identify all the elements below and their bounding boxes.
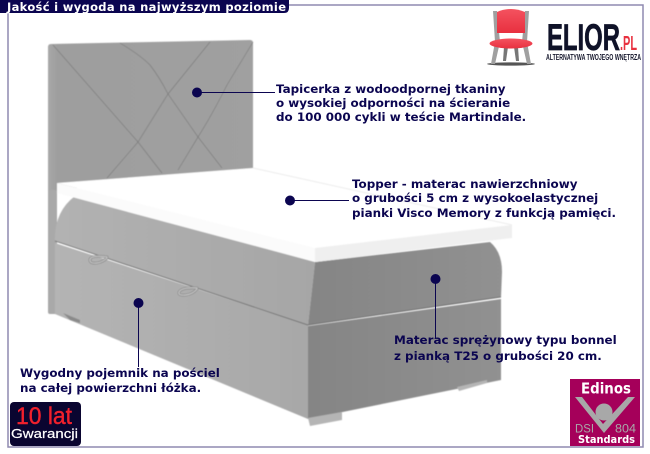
badge: Edinos standards: Edinos <box>581 380 631 398</box>
icon: V and circle <box>575 397 635 433</box>
feet <box>63 313 487 426</box>
callout: headboard upholstery <box>192 82 526 124</box>
callout: storage <box>20 298 220 395</box>
badge: 10 year warranty: Gwarancji <box>11 426 78 441</box>
badge: 10 year warranty <box>10 402 81 446</box>
mattress front <box>308 242 502 325</box>
text block: Materac sprężynowy typu bonnel <box>394 333 617 347</box>
white topper <box>57 168 512 262</box>
pointer <box>134 298 144 367</box>
text block: z pianką T25 o grubości 20 cm. <box>394 349 602 363</box>
badge: Edinos standards: Standards <box>578 433 635 446</box>
storage handles <box>90 256 197 295</box>
callout: topper <box>285 177 616 220</box>
text block: na całej powierzchni łóżka. <box>20 381 201 395</box>
mattress side <box>55 196 315 325</box>
text block: Tapicerka z wodoodpornej tkaniny <box>276 82 506 96</box>
badge: Edinos standards: DSI <box>575 422 594 436</box>
text block: o grubości 5 cm z wysokoelastycznej <box>352 191 598 205</box>
seam lines <box>55 241 501 325</box>
text block: do 100 000 cykli w teście Martindale. <box>276 110 526 124</box>
text block: Wygodny pojemnik na pościel <box>20 366 220 380</box>
title banner: Jakość i wygoda na najwyższym poziomie <box>6 0 286 14</box>
bed illustration <box>48 40 512 426</box>
text block: o wysokiej odporności na ścieranie <box>276 96 510 110</box>
icon: red chair <box>487 9 535 66</box>
pointer <box>192 88 275 98</box>
logo: Elior.pl <box>487 9 641 66</box>
callout: mattress <box>394 274 617 363</box>
headboard <box>48 40 253 314</box>
badge: 10 year warranty: 10 lat <box>16 403 72 430</box>
text block: Topper - materac nawierzchniowy <box>352 177 578 191</box>
text block: pianki Visco Memory z funkcją pamięci. <box>352 206 616 220</box>
badge: Edinos standards: 804 <box>615 422 636 436</box>
pointer <box>285 196 349 206</box>
badge: Edinos standards <box>570 379 640 446</box>
pointer <box>430 274 440 338</box>
storage box front <box>308 299 501 419</box>
storage box side <box>55 243 308 419</box>
